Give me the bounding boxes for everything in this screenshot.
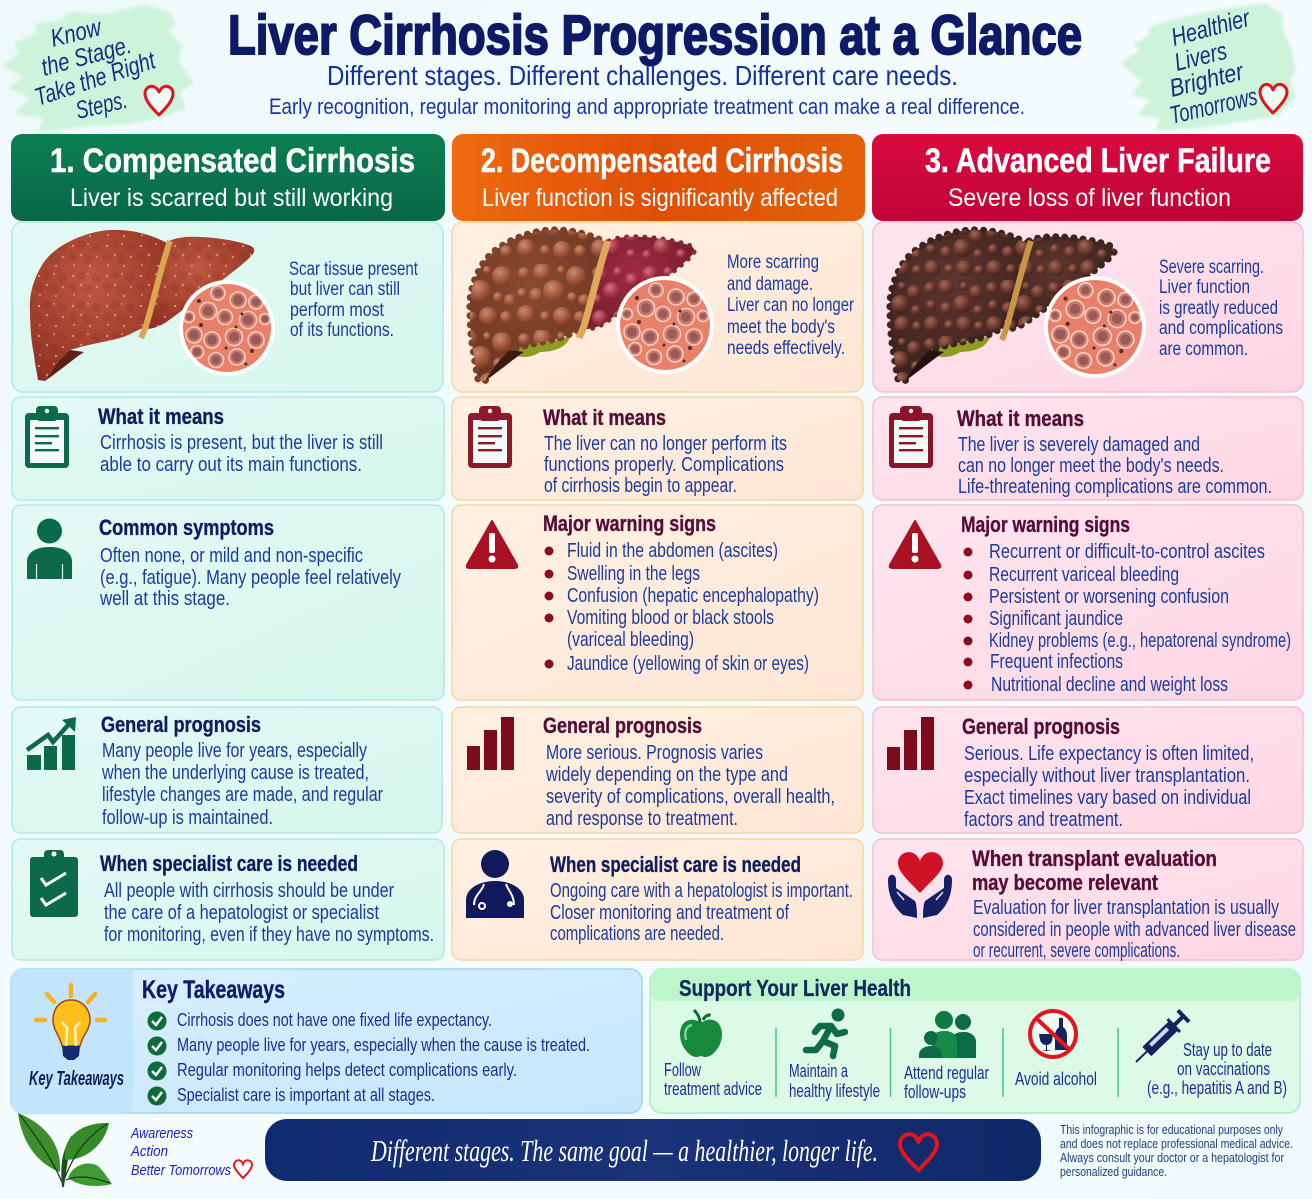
panel: stage 3 what it means — [873, 397, 1303, 500]
icon: syringe — [1130, 1008, 1191, 1068]
bullets — [964, 548, 972, 690]
takeaways list: Regular monitoring helps detect complications early. — [177, 1060, 517, 1080]
text: stage 1 summary: of its functions. — [290, 320, 394, 341]
text: stage 2 summary: needs effectively. — [727, 338, 845, 359]
takeaways list: Specialist care is important at all stages. — [177, 1085, 435, 1105]
icon: warning triangle — [890, 521, 940, 568]
text: stage 2 summary: Liver can no longer — [727, 295, 855, 316]
illustration: scarred liver — [30, 230, 273, 381]
heading: What it means — [98, 404, 224, 429]
warning list: Nutritional decline and weight loss — [991, 674, 1228, 696]
body text: (e.g., fatigue). Many people feel relatively — [100, 567, 401, 589]
heading: may become relevant — [972, 870, 1159, 895]
badge: Healthier Livers — [1121, 3, 1296, 131]
warning list — [567, 540, 819, 675]
panel: stage 2 specialist care — [452, 839, 863, 960]
body text: functions properly. Complications — [544, 454, 784, 476]
warning list: Confusion (hepatic encephalopathy) — [567, 585, 819, 607]
body text: the care of a hepatologist or specialist — [104, 902, 379, 924]
heading: General prognosis — [962, 714, 1120, 739]
body text — [973, 897, 1296, 962]
panel: support your liver health — [650, 969, 1300, 1113]
body text: The liver is severely damaged and — [958, 434, 1200, 456]
illustration: nodular liver — [470, 230, 694, 381]
column header: compensated cirrhosis: Liver is scarred but still working — [70, 184, 393, 212]
label: healthy lifestyle — [789, 1081, 880, 1101]
label: Follow — [664, 1060, 702, 1080]
text: stage 3 summary: are common. — [1159, 339, 1248, 360]
column header: compensated cirrhosis — [11, 134, 445, 221]
bullets — [544, 546, 554, 668]
text: stage 2 summary — [727, 252, 855, 359]
body text: and response to treatment. — [546, 808, 738, 830]
body text: for monitoring, even if they have no symptoms. — [104, 924, 434, 946]
icon: rising chart — [27, 717, 76, 770]
text: stage 3 summary: and complications — [1159, 318, 1283, 339]
tagline — [130, 1125, 252, 1179]
body text: widely depending on the type and — [545, 764, 788, 786]
column header: compensated cirrhosis: 1. Compensated Cirrhosis — [50, 142, 415, 180]
text: stage 3 summary: Severe scarring. — [1159, 257, 1264, 278]
label: on vaccinations — [1177, 1059, 1270, 1079]
body text: Cirrhosis is present, but the liver is still — [100, 432, 383, 454]
panel: stage 2 prognosis — [452, 707, 863, 833]
body text: able to carry out its main functions. — [100, 454, 362, 476]
heading: When specialist care is needed — [550, 852, 801, 877]
label — [1147, 1040, 1287, 1098]
warning list: Significant jaundice — [989, 608, 1123, 630]
label — [904, 1063, 989, 1102]
text: stage 1 summary — [289, 259, 419, 341]
body text: More serious. Prognosis varies — [546, 742, 763, 764]
heading: When transplant evaluation — [972, 846, 1217, 871]
heading — [972, 846, 1217, 895]
heading: When specialist care is needed — [100, 851, 358, 876]
body text: Ongoing care with a hepatologist is important. — [550, 880, 853, 902]
body text — [100, 432, 383, 476]
text: stage 3 summary: is greatly reduced — [1159, 298, 1278, 319]
text: stage 1 summary: but liver can still — [290, 279, 400, 300]
body text — [99, 545, 401, 610]
label — [789, 1061, 880, 1101]
icon: heart in hands — [888, 852, 952, 918]
body text: lifestyle changes are made, and regular — [102, 784, 383, 806]
label: Avoid alcohol — [1015, 1069, 1097, 1089]
heading: What it means — [957, 406, 1084, 431]
body text — [958, 434, 1272, 498]
panel: stage 1 specialist care — [12, 839, 444, 960]
text: stage 1 summary: perform most — [290, 300, 385, 321]
column header: advanced liver failure: Severe loss of liver function — [948, 184, 1231, 212]
icon: checklist clipboard — [30, 850, 78, 917]
label: Attend regular — [904, 1063, 989, 1083]
label: treatment advice — [664, 1079, 762, 1099]
warning list: Recurrent variceal bleeding — [989, 564, 1179, 586]
body text: factors and treatment. — [964, 809, 1123, 831]
body text: Serious. Life expectancy is often limited, — [964, 743, 1254, 765]
body text: Often none, or mild and non-specific — [100, 545, 363, 567]
text: stage 3 summary — [1159, 257, 1283, 360]
body text: Closer monitoring and treatment of — [550, 902, 789, 924]
warning list: (variceal bleeding) — [567, 629, 694, 651]
banner: Different stages. The same goal — a healthier, longer life. — [370, 1133, 878, 1168]
panel: stage 3 liver — [873, 222, 1303, 392]
panel: stage 3 prognosis — [873, 707, 1303, 833]
body text: The liver can no longer perform its — [544, 433, 787, 455]
badge: Healthier Livers: Livers — [1172, 37, 1230, 77]
column header: advanced liver failure — [872, 134, 1303, 221]
warning list: Swelling in the legs — [567, 563, 700, 585]
text: stage 3 summary: Liver function — [1159, 277, 1250, 298]
banner — [265, 1119, 1041, 1181]
badge: Know the Stage: Steps. — [73, 86, 130, 125]
badge: Know the Stage — [2, 5, 194, 132]
panel: stage 1 prognosis — [12, 707, 442, 833]
check icons — [148, 1012, 166, 1106]
icon: people — [919, 1011, 976, 1058]
body text — [545, 742, 835, 830]
takeaways list: Many people live for years, especially when the cause is treated. — [177, 1035, 590, 1055]
body text — [544, 433, 787, 497]
icon: person — [27, 518, 72, 579]
icon: clipboard — [889, 406, 933, 468]
takeaways list — [177, 1010, 590, 1105]
warning list — [989, 541, 1291, 696]
disclaimer — [1060, 1123, 1293, 1179]
tagline: Action — [130, 1143, 168, 1160]
warning list: Vomiting blood or black stools — [567, 607, 774, 629]
badge: Healthier Livers: Healthier — [1168, 4, 1254, 52]
panel: stage 1 what it means — [12, 397, 444, 500]
tagline: Better Tomorrows — [131, 1162, 231, 1179]
body text: can no longer meet the body's needs. — [958, 455, 1224, 477]
heading: Key Takeaways — [142, 976, 285, 1004]
panel: stage 3 warning signs — [873, 505, 1303, 700]
column header: decompensated cirrhosis: 2. Decompensated Cirrhosis — [481, 142, 843, 180]
badge: Know the Stage: Know — [48, 13, 105, 53]
body text: when the underlying cause is treated, — [101, 762, 369, 784]
panel: stage 1 liver — [12, 222, 443, 392]
disclaimer: personalized guidance. — [1060, 1165, 1167, 1179]
icon: doctor — [466, 850, 524, 918]
body text: Exact timelines vary based on individual — [964, 787, 1251, 809]
heading: Support Your Liver Health — [679, 975, 911, 1001]
label: follow-ups — [904, 1082, 966, 1102]
heading: General prognosis — [101, 712, 261, 737]
illustration: stage 3 tissue — [1046, 278, 1144, 376]
warning list: Fluid in the abdomen (ascites) — [567, 540, 778, 562]
panel: key takeaways — [11, 969, 642, 1113]
heading: Major warning signs — [961, 512, 1130, 537]
illustration: stage 2 tissue — [618, 278, 712, 372]
title: Liver Cirrhosis Progression at a Glance — [228, 3, 1082, 66]
illustration: severely scarred liver — [890, 230, 1114, 381]
text: stage 2 summary: and damage. — [727, 274, 813, 295]
panel: stage 3 transplant evaluation — [873, 839, 1303, 962]
column header: decompensated cirrhosis: Liver function is significantly affected — [482, 184, 838, 212]
panel: stage 2 liver — [452, 222, 863, 392]
icon: clipboard — [468, 406, 512, 468]
icon: no alcohol — [1030, 1011, 1076, 1057]
icon: runner — [806, 1008, 845, 1056]
icon: clipboard — [25, 406, 69, 468]
icon: bar chart — [467, 717, 514, 770]
heading: General prognosis — [543, 713, 702, 738]
body text: All people with cirrhosis should be under — [104, 880, 394, 902]
panel: stage 2 warning signs — [452, 505, 863, 700]
text: stage 2 summary: More scarring — [727, 252, 819, 273]
icon: green leaves — [18, 1113, 112, 1187]
badge: Healthier Livers: Tomorrows — [1167, 83, 1260, 130]
label — [664, 1060, 762, 1099]
subtitle: Different stages. Different challenges. Different care needs. — [327, 60, 958, 91]
body text — [964, 743, 1254, 831]
body text: severity of complications, overall health, — [546, 786, 835, 808]
heading: Common symptoms — [99, 515, 274, 540]
body text — [550, 880, 853, 945]
icon: warning triangle — [467, 521, 517, 568]
warning list: Jaundice (yellowing of skin or eyes) — [567, 653, 809, 675]
label: key takeaways: Key Takeaways — [29, 1068, 124, 1090]
text: stage 1 summary: Scar tissue present — [289, 259, 419, 280]
heading: Major warning signs — [543, 511, 716, 536]
icon: bar chart — [887, 717, 934, 770]
body text: Many people live for years, especially — [102, 740, 367, 762]
icon: light bulb — [36, 985, 105, 1060]
panel: stage 2 what it means — [452, 397, 863, 500]
text: stage 2 summary: meet the body's — [727, 317, 835, 338]
body text — [104, 880, 434, 946]
warning list: Persistent or worsening confusion — [989, 586, 1229, 608]
heading: What it means — [543, 405, 666, 430]
label: Stay up to date — [1183, 1040, 1272, 1060]
body text: follow-up is maintained. — [102, 807, 273, 829]
label: Maintain a — [789, 1061, 849, 1081]
tagline: Awareness — [130, 1125, 193, 1142]
icon: heart — [900, 1134, 937, 1170]
takeaways list: Cirrhosis does not have one fixed life expectancy. — [177, 1010, 492, 1030]
badge: Healthier Livers: Brighter — [1167, 57, 1248, 103]
body text: or recurrent, severe complications. — [973, 940, 1180, 962]
badge: Know the Stage: Take the Right — [31, 46, 160, 112]
body text: well at this stage. — [99, 588, 230, 610]
column header: decompensated cirrhosis — [452, 134, 865, 221]
body text: of cirrhosis begin to appear. — [544, 475, 737, 497]
body text — [101, 740, 383, 829]
intro line: Early recognition, regular monitoring and appropriate treatment can make a real difference. — [269, 94, 1025, 119]
panel: stage 1 common symptoms — [12, 505, 444, 700]
body text: complications are needed. — [550, 923, 724, 945]
body text: especially without liver transplantation. — [964, 765, 1250, 787]
warning list: Frequent infections — [990, 651, 1123, 673]
icon: apple — [680, 1010, 722, 1057]
badge: Know the Stage: the Stage. — [38, 31, 134, 82]
